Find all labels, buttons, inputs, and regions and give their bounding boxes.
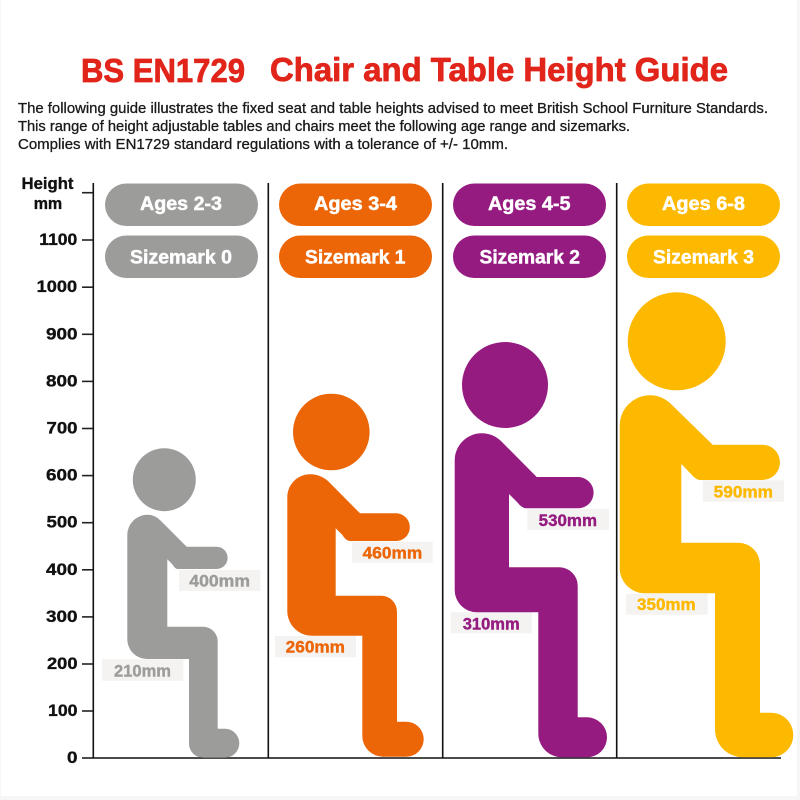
age pill: ages 6-8: Ages 6-8: [662, 194, 745, 215]
height axis: mm: [34, 194, 62, 213]
age pill: ages 4-5: Ages 4-5: [488, 194, 571, 215]
table height label: 590mm: 590mm: [714, 483, 773, 501]
age pill: ages 2-3: Ages 2-3: [140, 194, 222, 215]
table height label: 530mm: [527, 509, 609, 530]
height axis: 200: [47, 654, 78, 673]
height axis: 100: [48, 701, 78, 720]
seat height label: 350mm: 350mm: [637, 596, 696, 614]
age pill: ages 3-4: [279, 184, 432, 226]
title: [81, 52, 728, 90]
table height label: 460mm: 460mm: [363, 545, 422, 563]
height axis: 300: [46, 607, 78, 626]
height axis: Height: [22, 174, 74, 193]
sizemark pill: 1: [279, 236, 432, 278]
sizemark pill: 2: [453, 236, 606, 278]
seat height label: 310mm: 310mm: [463, 615, 520, 633]
intro text block: This range of height adjustable tables and chairs meet the following age range and sizemarks.: [18, 119, 630, 135]
height axis: 500: [46, 513, 78, 532]
height axis: 400: [46, 560, 78, 579]
sizemark pill: 3: [627, 236, 780, 278]
table height label: 400mm: [179, 570, 260, 591]
seated figure: orange: [287, 394, 424, 757]
seat height label: 210mm: 210mm: [114, 663, 171, 681]
sizemark pill: 2: Sizemark 2: [480, 248, 580, 268]
sizemark pill: 3: Sizemark 3: [653, 248, 754, 268]
seat height label: 260mm: [275, 636, 356, 657]
height axis: 0: [67, 748, 78, 767]
height axis: 1000: [37, 277, 77, 296]
seated figure: yellow: [620, 292, 793, 757]
table height label: 590mm: [703, 480, 784, 502]
height axis: 1100: [39, 230, 77, 249]
intro text block: [18, 101, 768, 153]
sizemark pill: 1: Sizemark 1: [305, 248, 406, 268]
table height label: 460mm: [352, 542, 433, 563]
height axis: 700: [46, 418, 78, 438]
seat height label: 210mm: [102, 659, 183, 681]
height axis: 600: [46, 466, 78, 485]
sizemark pill: 0: Sizemark 0: [130, 248, 232, 268]
intro text block: Complies with EN1729 standard regulations with a tolerance of +/- 10mm.: [18, 137, 508, 153]
column: ages 3-4: [275, 184, 433, 757]
title: Chair and Table Height Guide: [270, 52, 728, 89]
column: ages 6-8: [620, 184, 793, 757]
table height label: 530mm: 530mm: [539, 512, 597, 530]
age pill: ages 6-8: [627, 184, 780, 226]
column: ages 4-5: [451, 184, 609, 757]
height axis: [22, 174, 93, 767]
height axis: 900: [46, 324, 78, 343]
seat height label: 350mm: [626, 594, 708, 615]
table height label: 400mm: 400mm: [189, 573, 250, 591]
height axis: 800: [46, 371, 78, 390]
intro text block: The following guide illustrates the fixed seat and table heights advised to meet British School Furniture Standards.: [18, 101, 768, 117]
age pill: ages 3-4: Ages 3-4: [314, 194, 397, 215]
age pill: ages 2-3: [105, 184, 258, 226]
seat height label: 260mm: 260mm: [286, 639, 345, 657]
seated figure: grey: [127, 448, 239, 758]
title: BS EN1729: [81, 53, 245, 90]
seat height label: 310mm: [451, 612, 532, 633]
seated figure: purple: [455, 342, 607, 757]
column dividers and baseline: [82, 183, 781, 758]
sizemark pill: 0: [105, 236, 258, 278]
column: ages 2-3: [102, 184, 260, 758]
age pill: ages 4-5: [453, 184, 606, 226]
